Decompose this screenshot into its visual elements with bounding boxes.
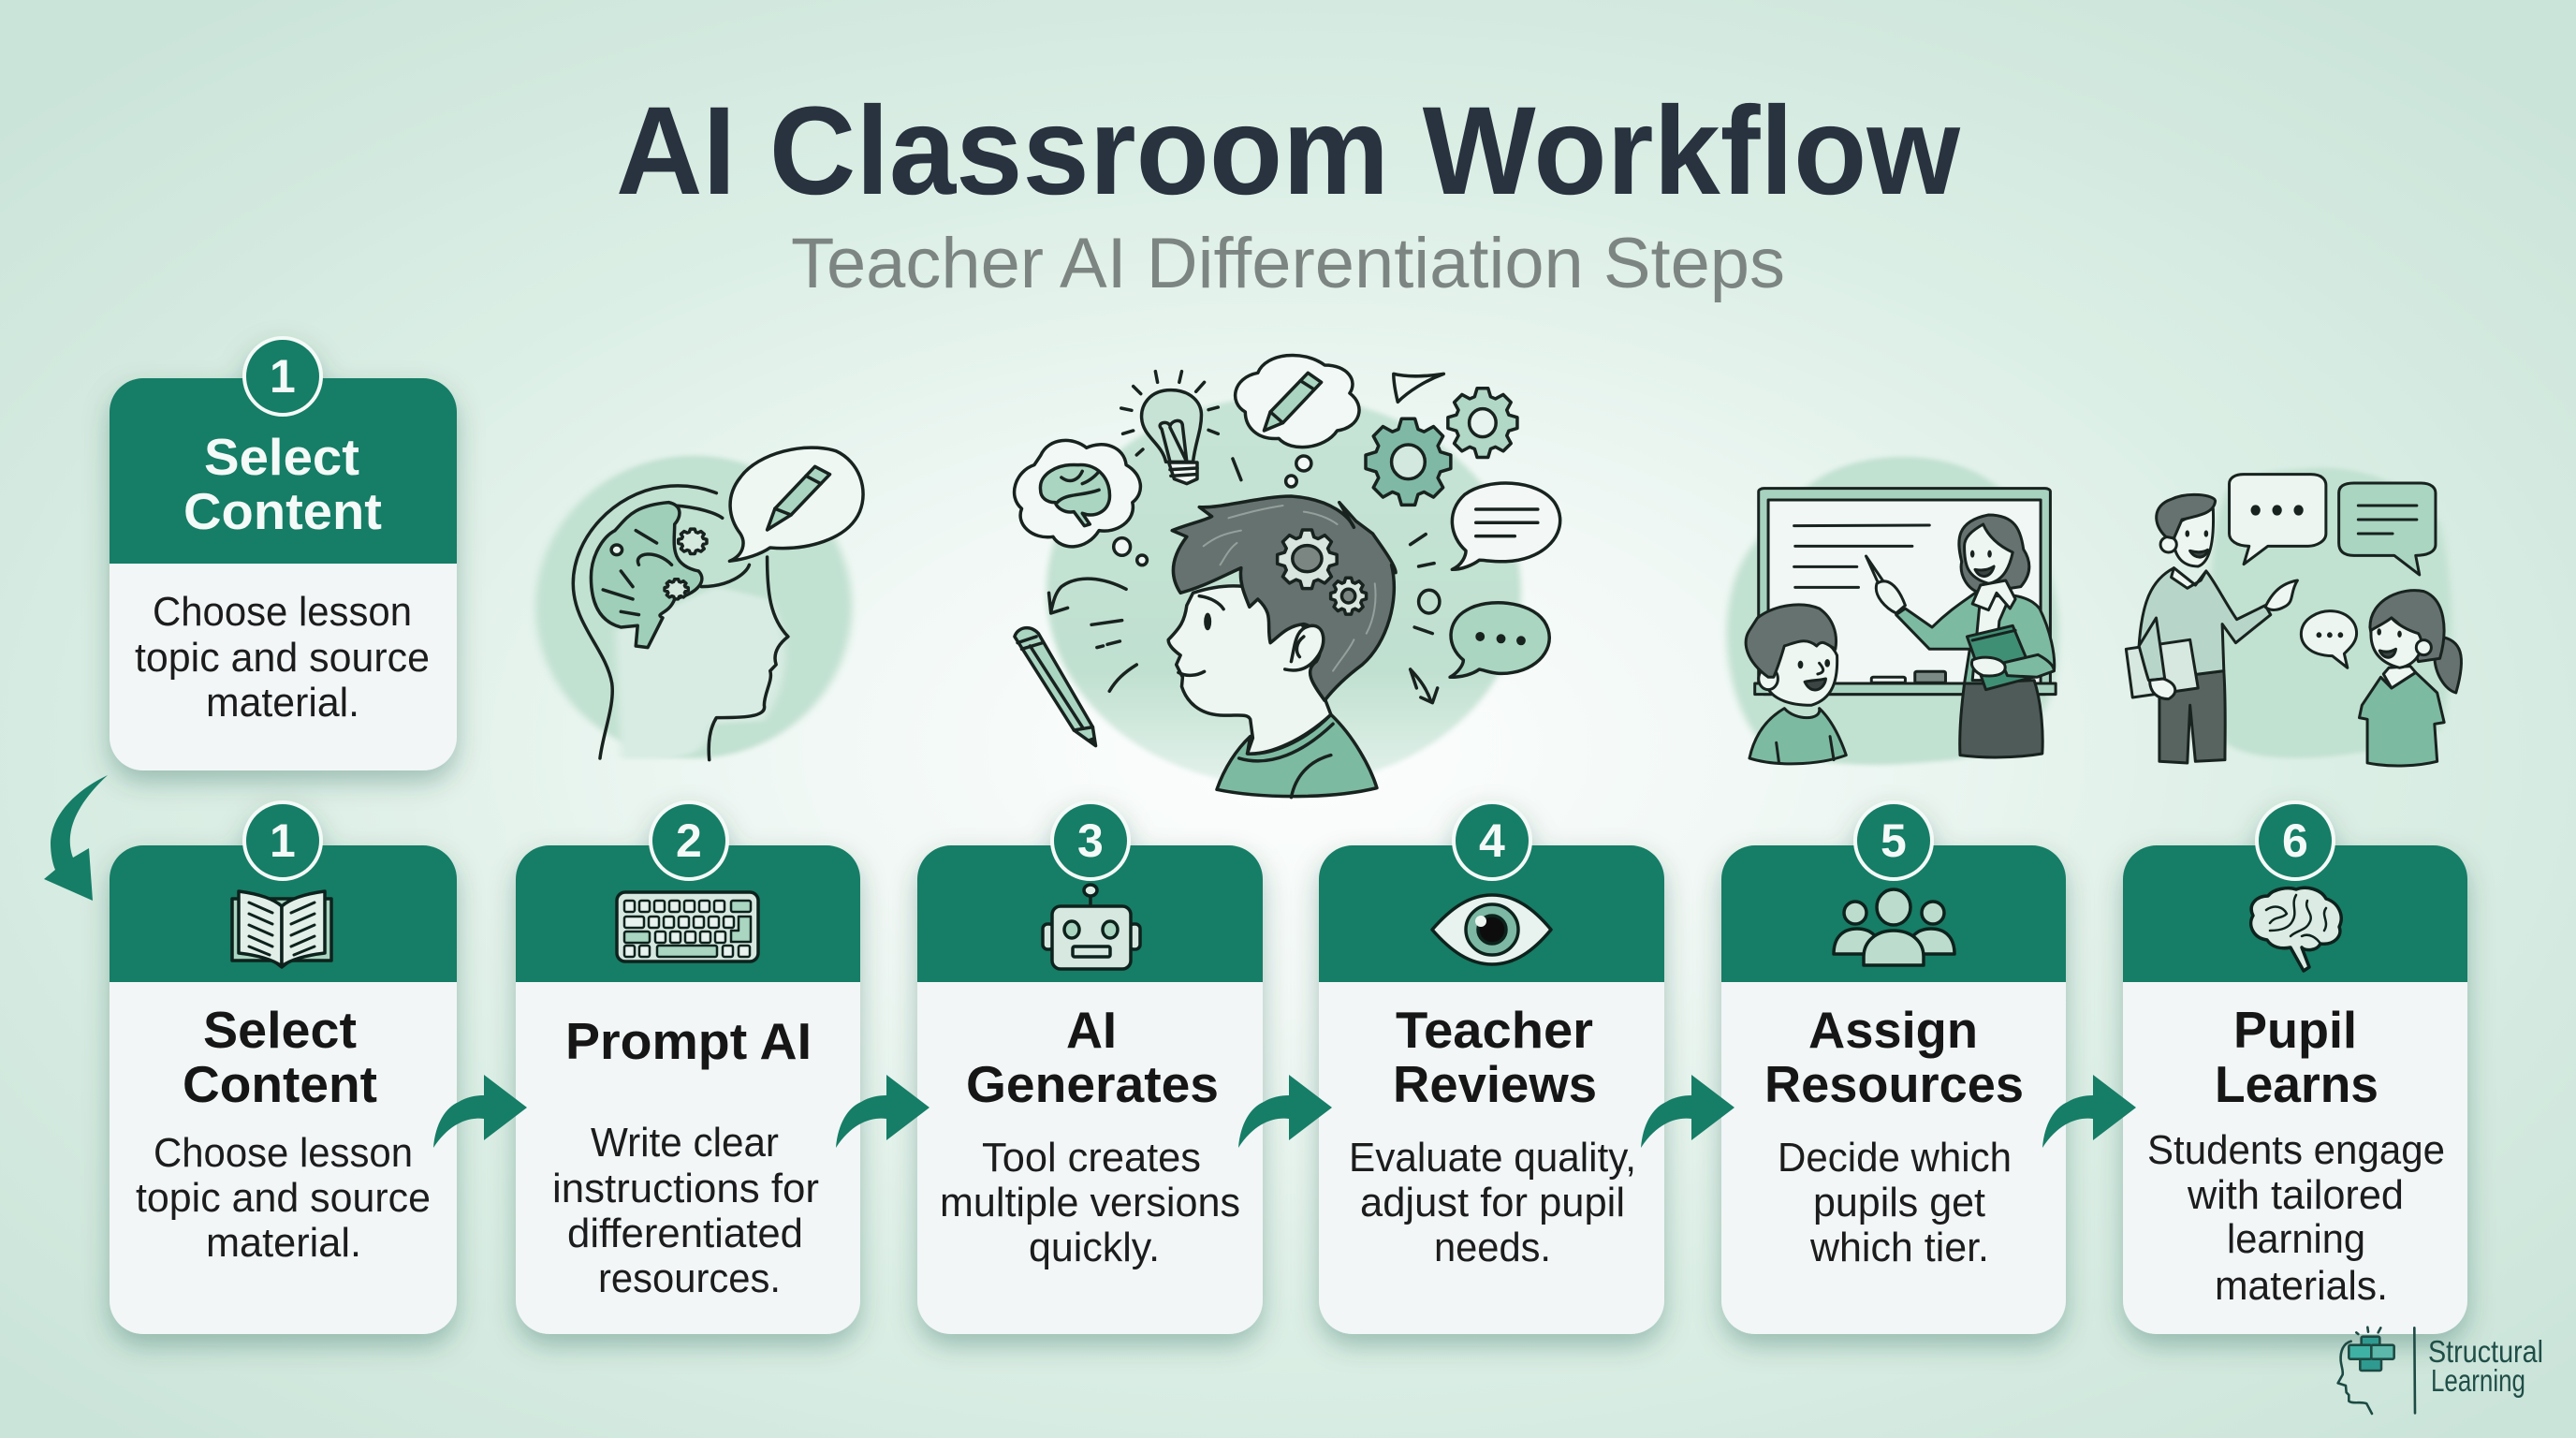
card body text <box>135 589 430 726</box>
illustration: boy thinking with ideas <box>1015 355 1560 798</box>
left pencil <box>1015 628 1096 746</box>
card heading <box>1764 1001 2024 1113</box>
card heading: Learns <box>2215 1055 2378 1113</box>
card body text: differentiated <box>567 1211 803 1256</box>
card body text: topic and source <box>136 1175 431 1221</box>
card body text: which tier. <box>1809 1225 1989 1270</box>
card body text <box>940 1135 1240 1270</box>
icon: group of people <box>1834 889 1954 965</box>
card heading: Resources <box>1764 1055 2024 1113</box>
card body text: instructions for <box>552 1166 819 1211</box>
number badge <box>651 802 727 879</box>
card body text: needs. <box>1434 1225 1551 1270</box>
number badge: 4 <box>1479 814 1505 867</box>
card body text: material. <box>206 1220 361 1266</box>
sweeping arrow and dashes <box>1049 579 1136 691</box>
card body text: Write clear <box>591 1120 779 1166</box>
panel: step 6 pupil learns <box>2123 802 2467 1334</box>
card heading <box>2215 1001 2378 1113</box>
icon: brain <box>2251 888 2341 971</box>
card body text: Decide which <box>1778 1135 2012 1181</box>
light bulb <box>1142 390 1201 462</box>
icon: open book <box>232 891 331 967</box>
card heading: Content <box>183 482 382 540</box>
right speech bubbles <box>1452 483 1560 569</box>
teacher <box>1959 515 2029 593</box>
icon: keyboard <box>617 892 758 961</box>
card body text <box>1349 1135 1636 1270</box>
card body text: multiple versions <box>940 1180 1240 1225</box>
card body text: with tailored <box>2187 1172 2404 1218</box>
number badge: 6 <box>2282 814 2308 867</box>
card heading <box>183 428 382 540</box>
card heading <box>183 1001 377 1113</box>
illustration: head with brain and pencil bubble <box>535 448 863 760</box>
arrow: from top card down to step 1 <box>44 775 108 901</box>
panel: step 3 AI generates <box>917 802 1263 1334</box>
card heading: AI <box>1066 1001 1117 1059</box>
number badge <box>1855 802 1932 879</box>
card body text: materials. <box>2215 1263 2388 1309</box>
panel: top select content card <box>110 338 457 770</box>
card body text: Evaluate quality, <box>1349 1135 1636 1181</box>
card body text: Tool creates <box>982 1135 1201 1181</box>
logo: Structural Learning <box>2338 1328 2543 1414</box>
top thought cloud with pencil <box>1236 355 1359 448</box>
card heading: Teacher <box>1396 1001 1593 1059</box>
card heading: Prompt AI <box>565 1012 812 1070</box>
logo: Structural Learning: Structural <box>2428 1334 2543 1369</box>
logo: Structural Learning: Learning <box>2431 1363 2525 1398</box>
card heading <box>1393 1001 1597 1113</box>
title: AI Classroom Workflow <box>616 81 1961 221</box>
number badge <box>2257 802 2334 879</box>
number badge <box>1052 802 1129 879</box>
number badge <box>1454 802 1530 879</box>
card heading: Reviews <box>1393 1055 1597 1113</box>
card body text: topic and source <box>135 635 430 681</box>
girl pupil <box>2435 637 2462 693</box>
panel: step 1 select content <box>110 802 457 1334</box>
card heading: Select <box>204 428 359 486</box>
panel: step 5 assign resources <box>1721 802 2066 1334</box>
sweater <box>1217 714 1377 797</box>
pupil boy <box>1749 709 1846 764</box>
icon: robot <box>1043 885 1140 969</box>
speech bubbles <box>2230 475 2326 565</box>
illustration: teacher at board with pupil <box>1727 457 2462 766</box>
man teacher <box>2159 671 2225 763</box>
card body text: material. <box>206 680 359 726</box>
number badge <box>244 338 321 415</box>
icon: eye <box>1432 895 1551 964</box>
subtitle: Teacher AI Differentiation Steps <box>791 224 1785 303</box>
arrow: step 4 to 5 <box>1641 1075 1734 1148</box>
card heading: Pupil <box>2233 1001 2357 1059</box>
card body text <box>136 1130 431 1266</box>
card heading: Assign <box>1808 1001 1978 1059</box>
card body text: resources. <box>598 1255 781 1301</box>
card body text <box>552 1120 819 1301</box>
card heading: Generates <box>966 1055 1219 1113</box>
card body text: adjust for pupil <box>1360 1180 1625 1225</box>
card heading: Content <box>183 1055 377 1113</box>
number badge: 1 <box>270 814 296 867</box>
number badge: 1 <box>270 350 296 403</box>
number badge <box>244 802 321 879</box>
card body text <box>1778 1135 2012 1270</box>
gears <box>1366 418 1451 505</box>
arrow: step 3 to 4 <box>1238 1075 1332 1148</box>
card heading: Select <box>203 1001 357 1059</box>
panel: step 2 prompt AI <box>516 802 860 1334</box>
card body text: Students engage <box>2147 1127 2445 1173</box>
whiteboard <box>1759 489 2050 695</box>
card body text: Choose lesson <box>153 589 412 635</box>
card body text <box>2147 1127 2445 1309</box>
card body text: quickly. <box>1029 1225 1160 1270</box>
left thought cloud <box>1015 440 1140 547</box>
arrow: step 1 to 2 <box>433 1075 527 1148</box>
number badge: 3 <box>1077 814 1104 867</box>
number badge: 5 <box>1881 814 1907 867</box>
card body text: pupils get <box>1813 1180 1985 1225</box>
panel: step 4 teacher reviews <box>1319 802 1664 1334</box>
number badge: 2 <box>676 814 702 867</box>
card body text: learning <box>2227 1216 2365 1262</box>
arrow: step 5 to 6 <box>2042 1075 2136 1148</box>
card body text: Choose lesson <box>154 1130 413 1176</box>
arrow: step 2 to 3 <box>836 1075 929 1148</box>
card heading <box>966 1001 1219 1113</box>
